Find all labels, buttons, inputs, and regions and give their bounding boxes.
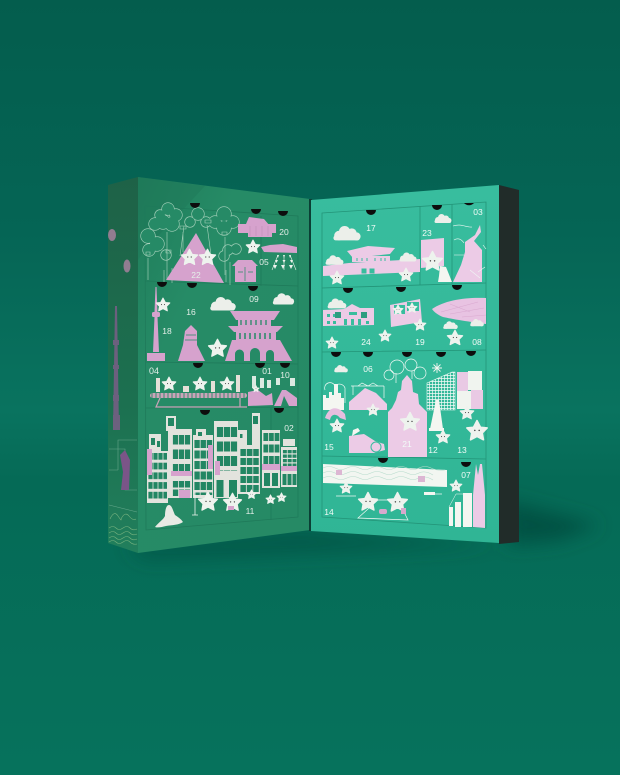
number 18: 18 bbox=[162, 326, 172, 336]
wave band bbox=[323, 464, 447, 487]
left front face bbox=[138, 177, 310, 553]
number 01: 01 bbox=[262, 366, 272, 376]
panel: left door bbox=[108, 177, 310, 553]
number 24: 24 bbox=[361, 337, 371, 347]
cone bbox=[429, 400, 444, 431]
river map bbox=[453, 225, 486, 282]
number 08: 08 bbox=[472, 337, 482, 347]
pink arch bbox=[325, 408, 346, 420]
number 17: 17 bbox=[366, 223, 376, 233]
palace bbox=[323, 246, 420, 276]
side street outlines bbox=[109, 440, 137, 512]
number 23: 23 bbox=[422, 228, 432, 238]
small gate bbox=[232, 260, 258, 282]
bus bbox=[390, 299, 422, 327]
building 6 bbox=[262, 430, 280, 488]
building 3 bbox=[193, 429, 213, 498]
stars bbox=[436, 406, 487, 443]
left lighting shade bbox=[138, 177, 205, 260]
building 2 bbox=[166, 416, 192, 498]
star 23 bbox=[423, 252, 442, 270]
number 20: 20 bbox=[279, 227, 289, 237]
number 02: 02 bbox=[284, 423, 294, 433]
hanok 20 bbox=[238, 217, 276, 237]
side tower bbox=[113, 306, 120, 430]
box shadow bbox=[125, 500, 600, 560]
left side face bbox=[108, 177, 138, 553]
white figure bbox=[438, 266, 452, 282]
gate bbox=[225, 311, 292, 361]
sun bbox=[432, 363, 442, 373]
number 13: 13 bbox=[457, 445, 467, 455]
number 16: 16 bbox=[186, 307, 196, 317]
panel: right door bbox=[311, 185, 519, 544]
number 11: 11 bbox=[246, 506, 255, 516]
colored blocks bbox=[457, 371, 483, 409]
stars bbox=[326, 319, 463, 348]
street stars bbox=[192, 490, 286, 515]
number 07: 07 bbox=[461, 470, 471, 480]
number 21: 21 bbox=[402, 439, 412, 449]
number 14: 14 bbox=[324, 507, 334, 517]
trees bbox=[384, 359, 426, 383]
building 4 bbox=[214, 421, 238, 498]
star bbox=[209, 339, 226, 356]
pink street 01 10 bbox=[248, 376, 297, 406]
clouds bbox=[210, 297, 236, 310]
stars bbox=[330, 271, 344, 284]
long palace bbox=[261, 244, 297, 253]
star bbox=[156, 298, 170, 311]
building 5 bbox=[238, 413, 260, 494]
building 1 bbox=[147, 434, 168, 503]
belt stars and bottles bbox=[156, 375, 240, 392]
stars bbox=[330, 419, 344, 432]
side pink clouds bbox=[108, 229, 130, 272]
star 05 bbox=[246, 240, 260, 253]
pink triangle 22 bbox=[166, 233, 224, 283]
number 06: 06 bbox=[363, 364, 373, 374]
side waves bbox=[109, 514, 137, 544]
tower block bbox=[427, 372, 455, 410]
pink hill bbox=[349, 383, 387, 410]
number 10: 10 bbox=[280, 370, 290, 380]
left drawer frame bbox=[145, 206, 298, 530]
school 24 bbox=[323, 304, 374, 326]
right drawer frame bbox=[322, 202, 486, 528]
buildings bbox=[147, 413, 297, 503]
right drawer notches bbox=[331, 203, 476, 467]
shell bbox=[432, 298, 486, 324]
clouds bbox=[443, 321, 458, 329]
cloud bbox=[334, 365, 348, 372]
star bbox=[450, 480, 462, 491]
building 7 bbox=[281, 439, 297, 487]
skyscrapers bbox=[449, 464, 485, 528]
number 15: 15 bbox=[324, 442, 334, 452]
number 12: 12 bbox=[428, 445, 438, 455]
picnic stars bbox=[336, 482, 442, 520]
cloud bbox=[328, 298, 346, 308]
clouds bbox=[326, 255, 343, 265]
star rows bbox=[272, 255, 296, 270]
big white star bbox=[155, 505, 183, 527]
number 09: 09 bbox=[249, 294, 259, 304]
number 22: 22 bbox=[191, 270, 201, 280]
pink panel 23 bbox=[421, 238, 444, 268]
conveyor belt bbox=[150, 393, 247, 407]
pagoda 21 bbox=[388, 375, 427, 457]
city left bbox=[323, 383, 345, 410]
right dark side bbox=[499, 185, 519, 544]
right front face bbox=[311, 185, 499, 543]
left drawer notches bbox=[157, 203, 290, 415]
number 19: 19 bbox=[415, 337, 425, 347]
cloud bbox=[333, 226, 361, 240]
tower 18 bbox=[147, 287, 165, 361]
number 03: 03 bbox=[473, 207, 483, 217]
temple 16 bbox=[178, 325, 205, 361]
trees outline bbox=[141, 203, 241, 285]
number 04: 04 bbox=[149, 366, 159, 376]
car bbox=[349, 428, 385, 453]
cloud bbox=[434, 214, 452, 223]
number 05: 05 bbox=[259, 257, 269, 267]
gap between doors bbox=[309, 199, 312, 531]
